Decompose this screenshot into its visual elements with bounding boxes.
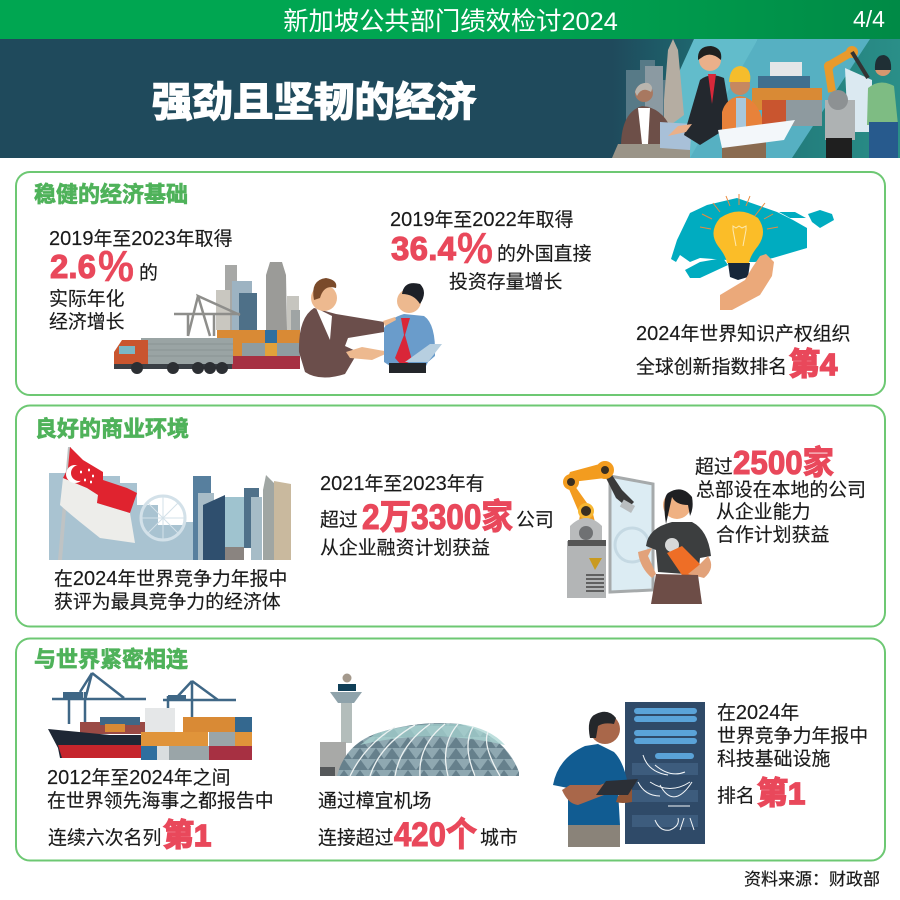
- top banner: [0, 0, 900, 39]
- text: most competitive economy: [54, 568, 287, 613]
- text: real GDP growth: 的: [139, 262, 158, 284]
- illustration: Singapore flag and skyline: [49, 447, 291, 560]
- text: most competitive economy: 获评为最具竞争力的经济体: [54, 591, 281, 613]
- icon: light bulb over Singapore map: [671, 194, 834, 310]
- text: Changi city links: 城市: [480, 827, 518, 849]
- text: tech infrastructure ranking: 排名: [717, 785, 755, 807]
- text: HQ companies partnership scheme: 超过: [695, 456, 733, 478]
- source note: 资料来源：财政部: [744, 870, 880, 889]
- text: tech infrastructure ranking: 在2024年: [717, 702, 799, 724]
- text: tech infrastructure ranking: 世界竞争力年报中: [717, 725, 868, 747]
- text: tech infrastructure ranking: [717, 702, 868, 811]
- text: real GDP growth: 经济增长: [49, 311, 125, 333]
- text: real GDP growth: 2019年至2023年取得: [49, 228, 232, 250]
- illustration: port, truck and handshake: [114, 262, 442, 378]
- page number: 4/4: [853, 6, 885, 32]
- heading: 与世界紧密相连: [34, 647, 188, 672]
- text: maritime capitals ranking: 在世界领先海事之都报告中: [47, 790, 274, 812]
- illustration: robot arm, screen and worker: [563, 461, 711, 604]
- text: FDI stock growth: 2019年至2022年取得: [390, 209, 573, 231]
- text: FDI stock growth: [390, 209, 592, 293]
- text: real GDP growth: %: [98, 242, 134, 291]
- panel: good business environment: [16, 406, 885, 626]
- text: enterprise financing scheme: 公司: [516, 510, 554, 531]
- text: enterprise financing scheme: 2021年至2023年有: [320, 473, 485, 495]
- text: Changi city links: 通过樟宜机场: [318, 790, 431, 812]
- text: most competitive economy: 在2024年世界竞争力年报中: [54, 568, 287, 590]
- text: Changi city links: 连接超过: [318, 827, 394, 849]
- text: enterprise financing scheme: 从企业融资计划获益: [320, 537, 490, 559]
- text: global innovation index: 全球创新指数排名: [636, 356, 787, 378]
- text: real GDP growth: 实际年化: [49, 288, 125, 310]
- text: enterprise financing scheme: 超过: [320, 509, 358, 531]
- text: enterprise financing scheme: 2万3300家: [362, 498, 513, 537]
- banner title: 新加坡公共部门绩效检讨2024: [283, 8, 618, 36]
- hero title: 强劲且坚韧的经济: [152, 79, 476, 125]
- text: real GDP growth: [49, 228, 232, 333]
- text: tech infrastructure ranking: 第1: [757, 776, 805, 811]
- text: global innovation index: 2024年世界知识产权组织: [636, 323, 851, 345]
- heading: 稳健的经济基础: [34, 182, 188, 207]
- text: Changi city links: [318, 790, 518, 854]
- hero band: [0, 39, 900, 158]
- text: global innovation index: [636, 323, 851, 382]
- illustration: technician with server rack: [553, 702, 705, 847]
- text: tech infrastructure ranking: 科技基础设施: [717, 748, 830, 770]
- hero illustration: people, port and robot: [612, 39, 898, 158]
- text: maritime capitals ranking: 第1: [163, 818, 211, 853]
- text: FDI stock growth: 的外国直接: [497, 243, 592, 265]
- text: HQ companies partnership scheme: 从企业能力: [716, 501, 810, 523]
- panel: solid economic foundations: [16, 172, 885, 395]
- text: FDI stock growth: 36.4: [391, 230, 457, 267]
- text: maritime capitals ranking: 2012年至2024年之间: [47, 767, 230, 789]
- text: HQ companies partnership scheme: 合作计划获益: [716, 524, 829, 546]
- text: maritime capitals ranking: [47, 767, 274, 853]
- text: FDI stock growth: 投资存量增长: [449, 271, 562, 293]
- illustration: container ship and cranes: [48, 673, 252, 760]
- text: global innovation index: 第4: [789, 347, 838, 382]
- text: Changi city links: 420个: [394, 816, 477, 854]
- text: real GDP growth: 2.6: [50, 248, 96, 285]
- text: HQ companies partnership scheme: [695, 444, 866, 546]
- heading: 良好的商业环境: [35, 416, 189, 442]
- text: enterprise financing scheme: [320, 473, 554, 559]
- text: HQ companies partnership scheme: 2500家: [733, 444, 834, 481]
- text: HQ companies partnership scheme: 总部设在本地的公司: [696, 479, 866, 501]
- text: maritime capitals ranking: 连续六次名列: [48, 827, 161, 849]
- panel: connected to the world: [16, 638, 885, 860]
- text: FDI stock growth: %: [457, 224, 493, 273]
- illustration: Changi Airport tower and dome: [320, 674, 519, 776]
